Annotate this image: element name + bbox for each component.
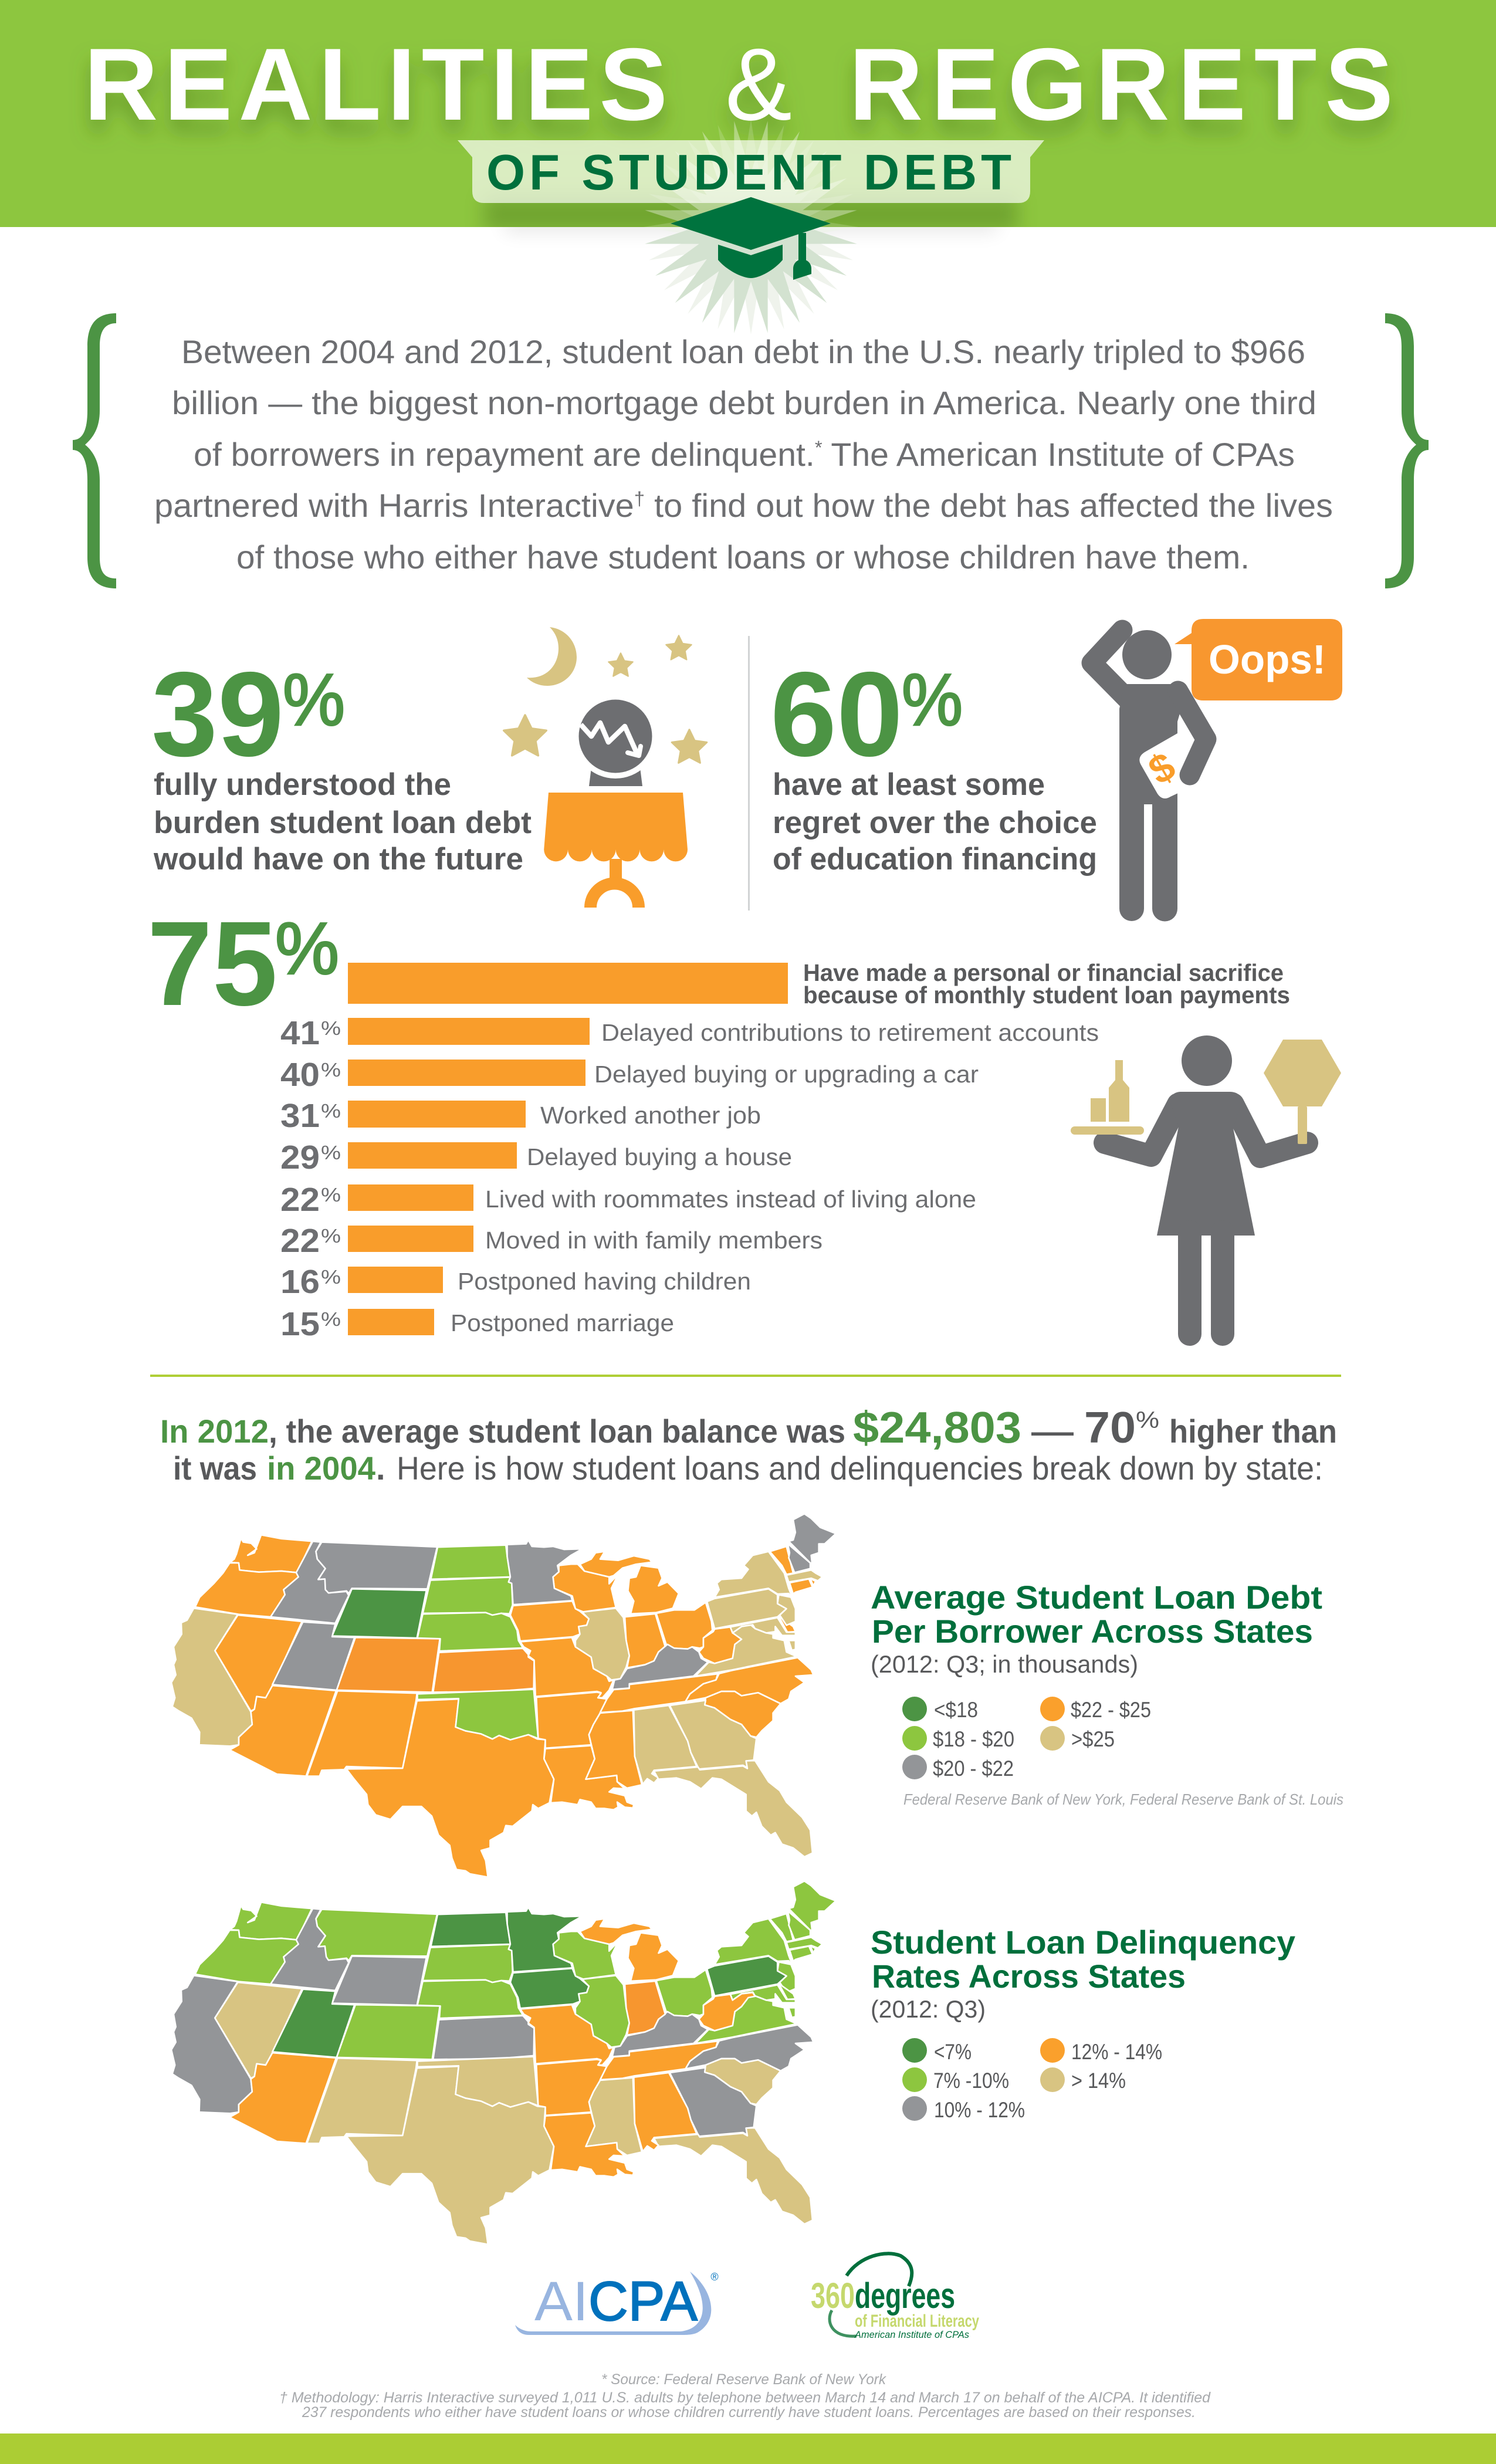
headline: average balance <box>160 1403 1337 1487</box>
legend: average student loan debt: <$18 <box>934 1698 978 1722</box>
footnotes: † Methodology: Harris Interactive surveyed 1,011 U.S. adults by telephone between March 14 and March 17 on behalf of the AICPA. It identified <box>279 2389 1211 2406</box>
logo: AICPA <box>515 2270 719 2335</box>
title <box>84 28 1393 142</box>
title: REALITIES <box>84 28 668 142</box>
footnotes <box>279 2371 1211 2421</box>
stat: 60 percent <box>770 647 1097 876</box>
intro text with braces: Between 2004 and 2012, student loan debt in the U.S. nearly tripled to $966 <box>181 333 1305 370</box>
divider <box>748 636 750 911</box>
bar chart: sacrifices: Postponed having children <box>458 1268 751 1295</box>
bar chart: sacrifices: % <box>321 1225 341 1247</box>
headline: average balance: . <box>376 1450 385 1487</box>
divider rule <box>150 1375 1341 1377</box>
legend: average student loan debt: $18 - $20 <box>933 1727 1014 1751</box>
headline: average balance: $24,803 <box>853 1403 1021 1452</box>
bar chart: sacrifices: Delayed contributions to retirement accounts <box>601 1019 1099 1046</box>
bar chart: sacrifices: % <box>321 1184 341 1206</box>
bar chart: sacrifices: 22 <box>280 1222 320 1260</box>
logo: 360 degrees of Financial Literacy: American Institute of CPAs <box>854 2329 969 2340</box>
stat: 39 percent: would have on the future <box>153 842 523 876</box>
headline: average balance: in 2004 <box>267 1450 375 1487</box>
legend: delinquency rates: 7% -10% <box>933 2069 1009 2093</box>
stat: 39 percent <box>151 647 532 876</box>
intro text with braces: partnered with Harris Interactive <box>154 487 620 524</box>
intro text with braces: billion — the biggest non-mortgage debt burden in America. Nearly one third <box>172 384 1316 421</box>
bar chart: sacrifices: % <box>321 1266 341 1288</box>
logo: 360 degrees of Financial Literacy: of Financial Literacy <box>855 2311 979 2331</box>
intro text with braces: The American Institute of CPAs <box>823 436 1295 473</box>
stat: 60 percent: % <box>902 659 963 741</box>
intro text with braces: † <box>634 488 645 509</box>
icon: graduation cap <box>671 197 831 280</box>
legend: delinquency rates: <7% <box>934 2040 972 2064</box>
icon: man scratching head with money bag <box>1092 630 1206 921</box>
bar chart: sacrifices <box>280 959 1290 1343</box>
map: average student loan debt by state <box>171 1514 836 1877</box>
footnotes: * Source: Federal Reserve Bank of New York <box>601 2371 886 2388</box>
logo: AICPA: ® <box>710 2271 719 2283</box>
legend: average student loan debt: (2012: Q3; in thousands) <box>871 1650 1138 1678</box>
bar chart: sacrifices: 16 <box>280 1263 320 1301</box>
intro text with braces: of those who either have student loans or whose children have them. <box>236 539 1250 576</box>
icon: man scratching head with money bag: $ <box>1141 744 1183 793</box>
legend: average student loan debt: >$25 <box>1071 1727 1115 1751</box>
bar chart: sacrifices: 31 <box>280 1097 320 1135</box>
stat: 60 percent: 60 <box>770 647 903 781</box>
legend: delinquency rates: Rates Across States <box>872 1958 1186 1995</box>
bar chart: sacrifices: % <box>321 1308 341 1330</box>
bar chart: sacrifices: % <box>321 1142 341 1163</box>
headline: average balance: In 2012 <box>160 1413 269 1450</box>
stat: 60 percent: regret over the choice <box>773 805 1097 840</box>
headline: average balance: % <box>1136 1407 1159 1433</box>
stat: 60 percent: of education financing <box>773 842 1097 876</box>
icon: woman with tray and stop sign <box>1071 1035 1341 1334</box>
bar chart: sacrifices: Delayed buying a house <box>527 1143 792 1170</box>
intro text with braces: to find out how the debt has affected the lives <box>645 487 1333 524</box>
legend: average student loan debt: Average Student Loan Debt <box>871 1579 1322 1616</box>
bar chart: sacrifices: 40 <box>280 1056 320 1094</box>
bar chart: sacrifices: 22 <box>280 1181 320 1219</box>
title: & <box>725 28 792 142</box>
soft shadow below header <box>506 227 996 235</box>
subtitle banner: OF STUDENT DEBT <box>486 145 1011 201</box>
intro text with braces: of borrowers in repayment are delinquent. <box>194 436 802 473</box>
legend: average student loan debt <box>871 1579 1343 1808</box>
legend: delinquency rates: Student Loan Delinquency <box>871 1924 1295 1961</box>
headline: average balance: Here is how student loans and delinquencies break down by state: <box>397 1450 1323 1487</box>
title: REGRETS <box>849 28 1393 142</box>
bar chart: sacrifices: 15 <box>280 1305 320 1343</box>
stat: 75 percent: 75 <box>147 896 277 1031</box>
sunburst behind cap <box>644 120 858 334</box>
bar chart: sacrifices: Lived with roommates instead of living alone <box>485 1186 976 1213</box>
headline: average balance: higher than <box>1169 1413 1337 1450</box>
map: student loan delinquency by state <box>171 1881 836 2245</box>
legend: average student loan debt: $22 - $25 <box>1071 1698 1151 1722</box>
stat: 75 percent <box>147 896 339 1031</box>
logo: 360 degrees of Financial Literacy <box>811 2253 979 2340</box>
callout: Oops speech bubble <box>1175 619 1342 700</box>
legend: delinquency rates: 10% - 12% <box>934 2098 1025 2122</box>
bar chart: sacrifices: Delayed buying or upgrading a car <box>594 1061 979 1088</box>
logo: 360 degrees of Financial Literacy: degrees <box>855 2276 955 2316</box>
bar chart: sacrifices: % <box>321 1017 341 1039</box>
headline: average balance: — <box>1031 1413 1074 1450</box>
bar chart: sacrifices: because of monthly student loan payments <box>803 981 1290 1008</box>
legend: average student loan debt: $20 - $22 <box>933 1756 1014 1781</box>
logo: AICPA: AI <box>534 2270 588 2333</box>
legend: delinquency rates: > 14% <box>1071 2069 1126 2093</box>
bar chart: sacrifices: Moved in with family members <box>485 1227 823 1254</box>
callout: Oops speech bubble: Oops! <box>1209 637 1326 682</box>
legend: average student loan debt: Per Borrower Across States <box>872 1613 1313 1650</box>
intro text with braces <box>73 313 1429 588</box>
header band <box>0 0 1496 227</box>
stat: 39 percent: % <box>283 659 345 741</box>
logo: 360 degrees of Financial Literacy: 360 <box>811 2276 855 2316</box>
stat: 60 percent: have at least some <box>773 767 1045 802</box>
legend: average student loan debt: Federal Reserve Bank of New York, Federal Reserve Bank of St. Louis <box>903 1791 1343 1808</box>
stat: 39 percent: burden student loan debt <box>154 805 532 840</box>
legend: delinquency rates: 12% - 14% <box>1071 2040 1162 2064</box>
bar chart: sacrifices: % <box>321 1100 341 1122</box>
headline: average balance: it was <box>173 1450 257 1487</box>
stat: 39 percent: 39 <box>151 647 284 781</box>
icon: crystal ball on table with moon and stars <box>504 627 707 908</box>
headline: average balance: , the average student loan balance was <box>269 1413 845 1450</box>
stat: 39 percent: fully understood the <box>154 767 451 802</box>
logo: AICPA: CPA <box>588 2270 698 2333</box>
legend: delinquency rates: (2012: Q3) <box>871 1995 986 2023</box>
footer band <box>0 2433 1496 2464</box>
bar chart: sacrifices: Have made a personal or financial sacrifice <box>803 959 1284 986</box>
stat: 75 percent: % <box>275 908 339 990</box>
bar chart: sacrifices: Worked another job <box>540 1102 761 1129</box>
legend: delinquency rates <box>871 1924 1295 2122</box>
banner shadow <box>478 203 1024 227</box>
bar chart: sacrifices: 41 <box>280 1014 320 1052</box>
bar chart: sacrifices: Postponed marriage <box>451 1309 674 1336</box>
intro text with braces: * <box>815 437 823 458</box>
footnotes: 237 respondents who either have student loans or whose children currently have student loans. Percentages are based on their responses. <box>302 2404 1196 2421</box>
headline: average balance: 70 <box>1084 1403 1136 1452</box>
bar chart: sacrifices: 29 <box>280 1139 320 1176</box>
bar chart: sacrifices: % <box>321 1059 341 1081</box>
